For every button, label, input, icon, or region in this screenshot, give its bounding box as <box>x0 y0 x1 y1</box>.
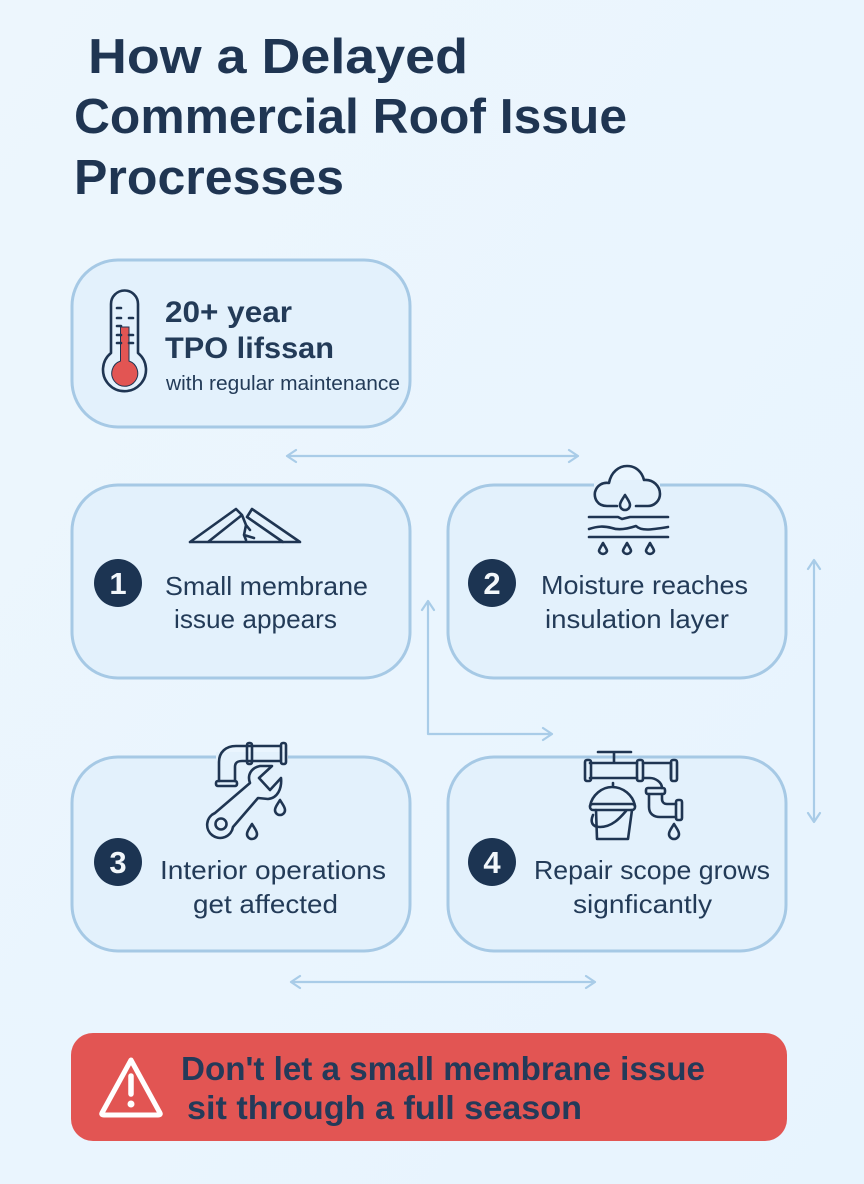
step 3 text: get affected <box>193 889 338 919</box>
step 2 text <box>541 570 748 634</box>
badge 4: 4 <box>483 845 501 880</box>
step 4 text: signficantly <box>573 889 712 919</box>
step 3 text <box>160 855 386 919</box>
panel: step 3 <box>72 743 410 951</box>
arrow: right vertical <box>808 560 820 822</box>
lifespan note: with regular maintenance <box>165 373 400 395</box>
step 4 text <box>534 855 770 919</box>
title <box>74 30 627 205</box>
title: Commercial Roof Issue <box>74 90 627 144</box>
callout banner <box>71 1033 787 1141</box>
badge 3: 3 <box>109 845 127 880</box>
panel: step 2 <box>448 466 786 678</box>
title: Procresses <box>74 151 344 205</box>
step 1 text: Small membrane <box>165 571 368 601</box>
badge 1 <box>94 559 142 607</box>
panel: step 1 <box>72 485 410 678</box>
badge 4 <box>468 838 516 886</box>
icon: cloud and moisture layers <box>589 466 668 554</box>
badge 3 <box>94 838 142 886</box>
callout text: sit through a full season <box>187 1089 582 1126</box>
step 2 text: insulation layer <box>545 604 729 634</box>
lifespan heading: TPO lifssan <box>165 332 334 365</box>
step 3 text: Interior operations <box>160 855 386 885</box>
step 4 text: Repair scope grows <box>534 855 770 885</box>
step 1 text <box>165 571 368 634</box>
badge 1: 1 <box>109 566 127 601</box>
callout text: Don't let a small membrane issue <box>181 1050 705 1087</box>
icon: pipe and wrench <box>207 743 288 839</box>
panel: TPO lifespan <box>72 260 410 427</box>
title: How a Delayed <box>88 30 468 84</box>
step 1 text: issue appears <box>174 604 337 634</box>
badge 2 <box>468 559 516 607</box>
callout text <box>181 1050 705 1126</box>
panel: step 4 <box>448 752 786 951</box>
icon: cracked roof <box>190 509 300 542</box>
lifespan heading <box>165 296 334 365</box>
step 2 text: Moisture reaches <box>541 570 748 600</box>
icon: pipes and bucket <box>585 752 682 839</box>
arrow: top horizontal <box>287 450 578 462</box>
icon: warning triangle <box>102 1060 160 1115</box>
lifespan heading: 20+ year <box>165 296 292 329</box>
icon: thermometer <box>103 290 146 391</box>
arrow: elbow connector <box>422 601 552 740</box>
arrow: bottom horizontal <box>291 976 595 988</box>
badge 2: 2 <box>483 566 501 601</box>
